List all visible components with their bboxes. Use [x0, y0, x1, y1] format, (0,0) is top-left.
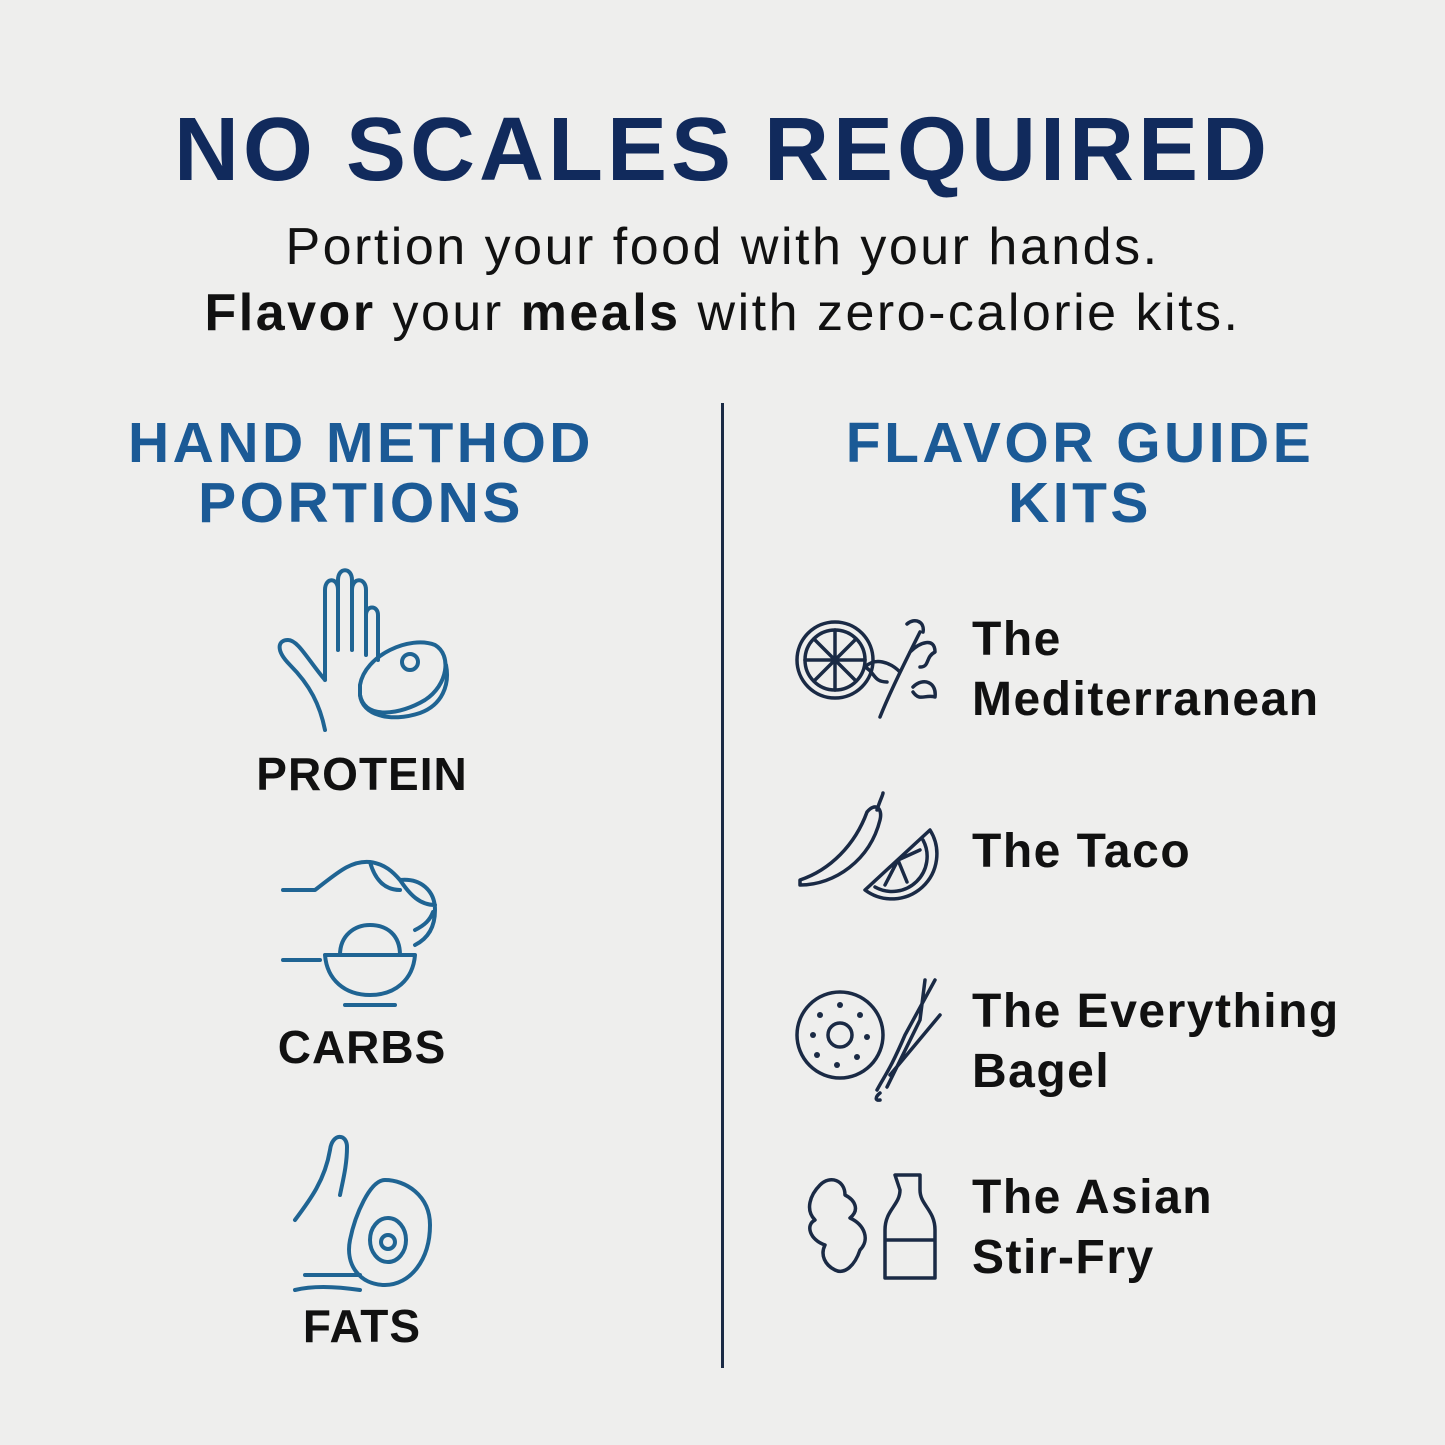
subtitle: Flavor your meals with zero-calorie kits.: [204, 284, 1240, 342]
kit: taco: The Taco: [972, 825, 1191, 878]
kit: mediterranean: Mediterranean: [972, 673, 1320, 726]
kit: asian stir-fry: Stir-Fry: [972, 1231, 1155, 1284]
label: carbs: CARBS: [278, 1021, 446, 1073]
kit: mediterranean: The: [972, 613, 1062, 666]
kit: everything bagel: The Everything: [972, 985, 1340, 1038]
icon: hand with steak: [278, 568, 450, 732]
icon: fist with rice bowl: [281, 860, 437, 1007]
kit: everything bagel: Bagel: [972, 1045, 1110, 1098]
icon: ginger and soy sauce: [808, 1173, 937, 1280]
subtitle: Portion your food with your hands.: [285, 218, 1160, 276]
icon: bagel and scallion: [795, 978, 942, 1102]
divider: [721, 403, 724, 1368]
kit: asian stir-fry: The Asian: [972, 1171, 1213, 1224]
icon: thumb with avocado: [292, 1134, 432, 1292]
icon: lemon and parsley: [795, 619, 937, 719]
kit: everything bagel: [972, 985, 1340, 1098]
subtitle: [204, 218, 1240, 342]
heading: hand method: PORTIONS: [198, 471, 524, 535]
kit: mediterranean: [972, 613, 1320, 726]
label: fats: FATS: [303, 1300, 421, 1352]
kit: asian stir-fry: [972, 1171, 1213, 1284]
heading: flavor guide: KITS: [1008, 471, 1152, 535]
heading: flavor guide: [846, 411, 1314, 535]
title: NO SCALES REQUIRED: [174, 100, 1271, 200]
heading: hand method: [128, 411, 594, 535]
icon: chili and lime: [798, 791, 939, 901]
heading: hand method: HAND METHOD: [128, 411, 594, 475]
heading: flavor guide: FLAVOR GUIDE: [846, 411, 1314, 475]
label: protein: PROTEIN: [256, 748, 468, 800]
